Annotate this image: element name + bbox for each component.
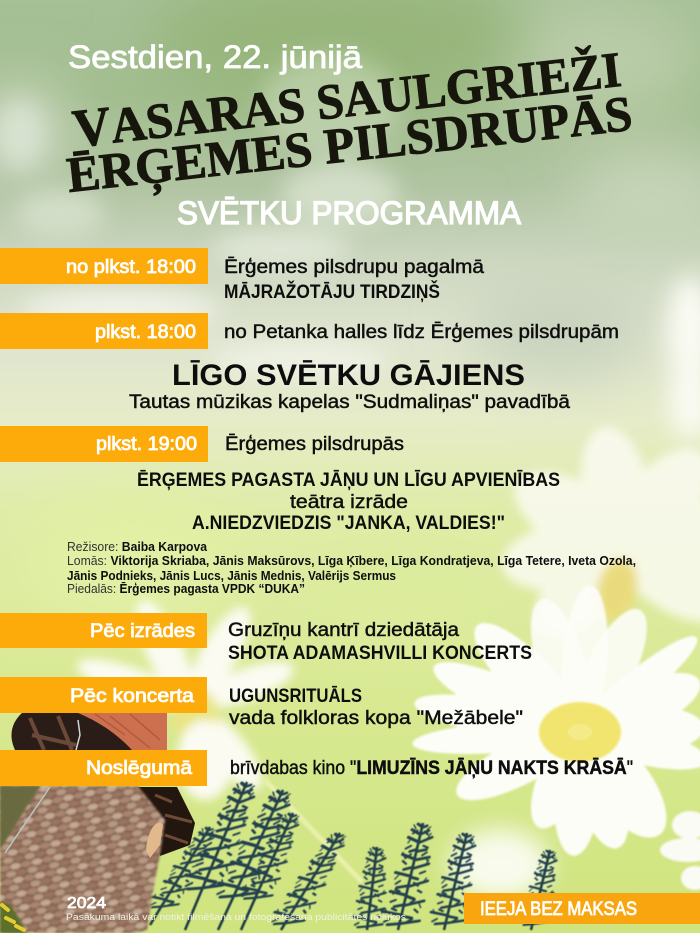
title: ĒRĢEMES PILSDRUPĀS — [64, 85, 635, 206]
item: fire ritual — [229, 686, 523, 729]
item: concert: Gruzīņu kantrī dziedātāja — [228, 620, 459, 641]
item: concert — [228, 620, 532, 664]
cast credits — [67, 540, 636, 596]
date heading: Sestdien, 22. jūnijā — [68, 39, 362, 75]
item: procession: LĪGO SVĒTKU GĀJIENS — [172, 359, 525, 392]
item: market: Ērģemes pilsdrupu pagalmā — [224, 257, 484, 278]
item: fire ritual: vada folkloras kopa "Mežābele" — [229, 708, 523, 729]
item: theatre: ĒRĢEMES PAGASTA JĀŅU UN LĪGU APVIENĪBAS — [137, 470, 560, 491]
item: theatre: Ērģemes pilsdrupās — [225, 434, 404, 455]
cast credits: Piedalās: Ērģemes pagasta VPDK “DUKA” — [67, 582, 305, 596]
daisy: left background flower — [72, 593, 299, 800]
footer year and notice — [66, 895, 407, 922]
daisy: small right-edge flower — [660, 811, 700, 890]
footer year and notice: Pasākuma laikā var notikt filmēšana un fotografēšana publicitātes nolūkos — [66, 912, 407, 922]
stalk: pale diagonal stem — [265, 780, 362, 882]
cast credits: Jānis Podnieks, Jānis Lucs, Jānis Mednis, Valērijs Sermus — [67, 569, 396, 583]
free entry badge — [464, 893, 700, 924]
item: theatre: A.NIEDZVIEDZIS "JANKA, VALDIES!" — [192, 513, 505, 534]
footer year and notice: 2024 — [67, 895, 106, 912]
item: concert: SHOTA ADAMASHVILLI KONCERTS — [228, 643, 532, 664]
free entry badge: IEEJA BEZ MAKSAS — [480, 899, 637, 920]
time labels: no plkst. 18:00 — [66, 257, 196, 278]
time labels — [66, 257, 197, 779]
item: theatre — [137, 434, 560, 534]
cast credits: Režisore: Baiba Karpova — [67, 540, 208, 554]
item: fire ritual: UGUNSRITUĀLS — [229, 686, 362, 707]
photo: castle tower roof — [11, 713, 167, 750]
time labels: plkst. 19:00 — [96, 434, 197, 455]
section heading: SVĒTKU PROGRAMMA — [177, 195, 522, 231]
orange time bars — [0, 248, 208, 786]
item: cinema: brīvdabas kino "LIMUZĪNS JĀŅU NAKTS KRĀSĀ" — [230, 758, 633, 779]
item: theatre: teātra izrāde — [290, 492, 408, 513]
photo: castle tower stone wall — [0, 786, 195, 933]
daisy: large foreground flower — [411, 584, 700, 857]
time labels: Pēc izrādes — [90, 621, 195, 642]
time labels: plkst. 18:00 — [95, 322, 196, 343]
item: procession: no Petanka halles līdz Ērģemes pilsdrupām — [224, 322, 619, 343]
item: market: MĀJRAŽOTĀJU TIRDZIŅŠ — [224, 281, 440, 303]
item: procession: Tautas mūzikas kapelas "Sudmaliņas" pavadībā — [129, 392, 570, 413]
item: market — [224, 257, 484, 303]
title: VASARAS SAULGRIEŽI — [70, 38, 624, 159]
time labels: Noslēgumā — [86, 758, 192, 779]
item: procession — [129, 322, 619, 413]
time labels: Pēc koncerta — [70, 686, 194, 707]
daisy: upper background flower — [496, 421, 700, 652]
trees: larch silhouettes — [146, 782, 564, 930]
cast credits: Lomās: Viktorija Skriaba, Jānis Maksūrovs, Līga Ķībere, Līga Kondratjeva, Līga Tetere, Iveta Ozola, — [67, 554, 636, 568]
